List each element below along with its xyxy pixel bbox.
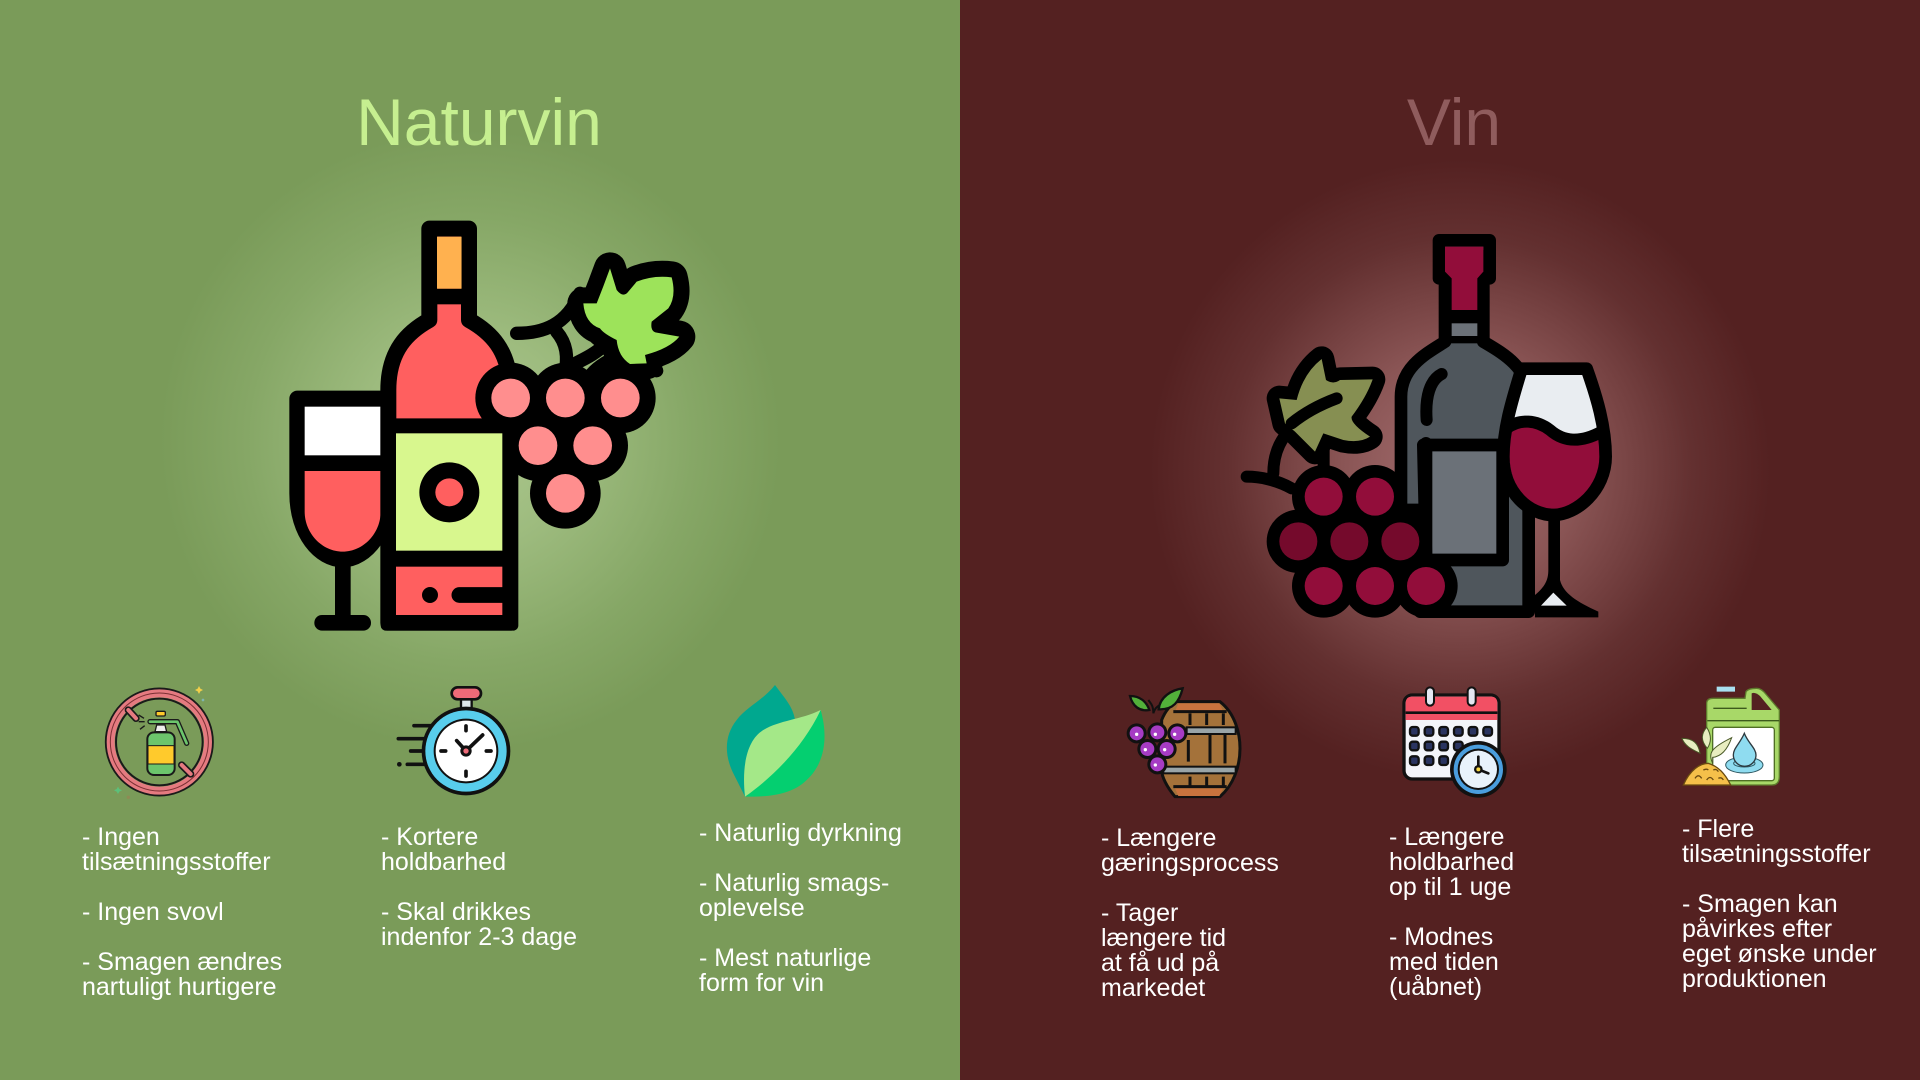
icon: wine glass with red wine bbox=[1503, 369, 1606, 617]
text: Længere holdbarhed: - Længere bbox=[1389, 823, 1504, 851]
text: Ingen tilsætningsstoffer: - Ingen bbox=[82, 823, 160, 851]
text: Længere holdbarhed: (uåbnet) bbox=[1389, 973, 1482, 1001]
icon: stopwatch bbox=[396, 686, 510, 796]
icon: wine glass bbox=[297, 399, 388, 631]
text: Længere gæringsprocess: - Længere bbox=[1101, 824, 1216, 852]
text: Flere tilsætningsstoffer: - Smagen kan bbox=[1682, 890, 1838, 918]
illustration: rosé bottle, glass and grapes bbox=[289, 220, 696, 631]
icon: leaves bbox=[726, 685, 824, 797]
text: Ingen tilsætningsstoffer: - Ingen svovl bbox=[82, 898, 224, 926]
title: Vin: Vin bbox=[1407, 85, 1501, 159]
text: Naturlig dyrkning: oplevelse bbox=[699, 894, 805, 922]
icon: vine leaf bbox=[1247, 359, 1373, 488]
text: Længere gæringsprocess: at få ud på bbox=[1101, 949, 1219, 977]
icon: dark bottle bbox=[1401, 240, 1529, 612]
text: Naturlig dyrkning: - Mest naturlige bbox=[699, 944, 871, 972]
text: Ingen tilsætningsstoffer: tilsætningsstoffer bbox=[82, 848, 271, 876]
text: Ingen tilsætningsstoffer bbox=[82, 823, 282, 1001]
text: Længere holdbarhed: op til 1 uge bbox=[1389, 873, 1511, 901]
text: Flere tilsætningsstoffer bbox=[1682, 815, 1877, 993]
icon: grapes bbox=[475, 363, 656, 529]
text: Naturlig dyrkning: - Naturlig smags- bbox=[699, 869, 889, 897]
text: Kortere holdbarhed: - Kortere bbox=[381, 823, 478, 851]
title: Naturvin: Naturvin bbox=[356, 85, 602, 159]
text: Naturlig dyrkning bbox=[699, 819, 902, 997]
text: Naturlig dyrkning: - Naturlig dyrkning bbox=[699, 819, 902, 847]
text: Kortere holdbarhed bbox=[381, 823, 577, 951]
icon: barrel with grapes bbox=[1126, 687, 1242, 798]
icon: no additives spray bbox=[104, 686, 214, 799]
text: Flere tilsætningsstoffer: produktionen bbox=[1682, 965, 1827, 993]
icon: vine stems bbox=[517, 293, 657, 380]
text: Længere gæringsprocess: længere tid bbox=[1101, 924, 1226, 952]
text: Længere holdbarhed: - Modnes bbox=[1389, 923, 1493, 951]
text: Flere tilsætningsstoffer: tilsætningsstoffer bbox=[1682, 840, 1871, 868]
text: Ingen tilsætningsstoffer: - Smagen ændres bbox=[82, 948, 282, 976]
icon: bottle bbox=[388, 229, 510, 623]
panel: Vin bbox=[960, 0, 1920, 1080]
text: Længere gæringsprocess bbox=[1101, 824, 1279, 1002]
icon: additive jug bbox=[1682, 686, 1780, 786]
text: Ingen tilsætningsstoffer: nartuligt hurtigere bbox=[82, 973, 277, 1001]
icon: bottle label bbox=[381, 418, 518, 631]
text: Længere holdbarhed bbox=[1389, 823, 1514, 1001]
text: Kortere holdbarhed: indenfor 2-3 dage bbox=[381, 923, 577, 951]
text: Længere holdbarhed: holdbarhed bbox=[1389, 848, 1514, 876]
text: Flere tilsætningsstoffer: eget ønske under bbox=[1682, 940, 1877, 968]
text: Flere tilsætningsstoffer: - Flere bbox=[1682, 815, 1754, 843]
text: Naturlig dyrkning: form for vin bbox=[699, 969, 824, 997]
text: Længere gæringsprocess: markedet bbox=[1101, 974, 1205, 1002]
icon: red grapes bbox=[1267, 465, 1458, 618]
text: Længere holdbarhed: med tiden bbox=[1389, 948, 1499, 976]
text: Længere gæringsprocess: - Tager bbox=[1101, 899, 1178, 927]
illustration: red wine bottle, glass and grapes bbox=[1240, 234, 1612, 618]
text: Kortere holdbarhed: - Skal drikkes bbox=[381, 898, 531, 926]
icon: vine leaf bbox=[583, 268, 679, 364]
text: Flere tilsætningsstoffer: påvirkes efter bbox=[1682, 915, 1832, 943]
panel: Naturvin bbox=[0, 0, 960, 1080]
icon: calendar with clock bbox=[1402, 686, 1507, 798]
text: Kortere holdbarhed: holdbarhed bbox=[381, 848, 506, 876]
text: Længere gæringsprocess: gæringsprocess bbox=[1101, 849, 1279, 877]
